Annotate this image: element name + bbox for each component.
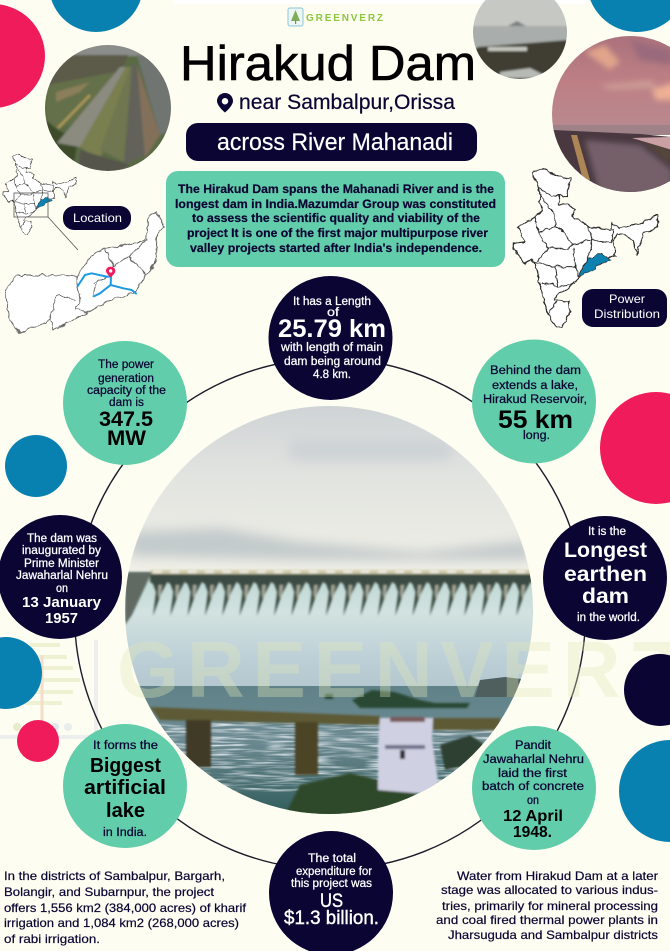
power distribution label: Power — [609, 292, 645, 306]
logo icon — [288, 8, 303, 26]
location label — [63, 206, 131, 230]
fact: inauguration — [0, 515, 122, 639]
text block: industry: stage was allocated to various indus- — [441, 883, 658, 897]
fact: expenditure: $1.3 billion. — [284, 908, 379, 929]
connecting ring — [74, 358, 586, 870]
fact: power capacity: The power — [98, 359, 154, 371]
fact: power capacity: dam is — [109, 397, 144, 409]
text block: irrigation: In the districts of Sambalpur, Bargarh, — [4, 869, 225, 883]
intro panel: The Hirakud Dam spans the Mahanadi River and is the — [178, 182, 494, 196]
map: India locator small — [3, 154, 78, 250]
fact: biggest artificial lake: Biggest — [90, 755, 161, 777]
central photo: Hirakud dam spillway — [120, 400, 540, 820]
fact: expenditure: this project was — [291, 878, 372, 890]
fact: expenditure: The total — [308, 853, 356, 865]
fact: length — [268, 276, 392, 400]
fact: length: of — [327, 307, 340, 319]
fact: concrete: 12 April — [503, 808, 563, 825]
text block: irrigation: Bolangir, and Subarnpur, the project — [4, 885, 215, 899]
logo wordmark: GREENVERZ — [306, 13, 383, 24]
photo: sunset over embankment — [550, 30, 670, 195]
intro panel: valley projects started after India's independence. — [190, 241, 482, 255]
text block: industry: Jharsuguda and Sambalpur districts — [448, 928, 658, 942]
logo — [288, 8, 383, 26]
text block: industry: Water from Hirakud Dam at a later — [457, 869, 658, 883]
location label: Location — [73, 211, 122, 225]
fact: lake: long. — [523, 430, 550, 442]
fact: lake: Hirakud Reservoir, — [483, 394, 587, 406]
fact: longest earthen dam: earthen — [564, 563, 647, 586]
text block: irrigation: of rabi irrigation. — [4, 932, 100, 946]
fact: concrete: Pandit — [515, 740, 552, 752]
text block: irrigation: irrigation and 1,084 km2 (268,000 acres) — [4, 916, 239, 930]
fact: biggest artificial lake: artificial — [84, 777, 166, 799]
fact: lake: 55 km — [498, 406, 573, 434]
fact: power capacity — [63, 341, 187, 465]
text block: industry: and coal fired thermal power plants in — [436, 913, 658, 927]
fact: length: 25.79 km — [278, 315, 386, 343]
fact: longest earthen dam: dam — [582, 585, 629, 608]
text block: irrigation — [4, 869, 247, 946]
fact: biggest artificial lake: lake — [106, 800, 145, 822]
river banner: across River Mahanadi — [217, 129, 453, 156]
fact: inauguration: on — [56, 583, 68, 595]
fact: longest earthen dam: It is the — [588, 526, 626, 538]
fact: inauguration: Jawaharlal Nehru — [16, 570, 108, 582]
fact: concrete: batch of concrete — [482, 781, 584, 793]
fact: power capacity: 347.5 — [99, 408, 153, 431]
fact: concrete: 1948. — [513, 824, 552, 841]
intro panel: to assess the scientific quality and viability of the — [192, 211, 480, 225]
river banner — [186, 123, 477, 161]
intro panel: project It is one of the first major multipurpose river — [187, 226, 488, 240]
river — [77, 273, 137, 297]
fact: expenditure — [269, 831, 393, 951]
fact: inauguration: The dam was — [27, 533, 97, 545]
fact: biggest artificial lake: in India. — [103, 827, 147, 839]
fact: longest earthen dam: Longest — [564, 539, 647, 562]
fact: length: 4.8 km. — [313, 369, 351, 381]
fact: length: It has a Length — [293, 296, 371, 308]
intro panel: longest dam in India.Mazumdar Group was constituted — [175, 197, 496, 211]
fact: biggest artificial lake — [63, 724, 187, 848]
watermark icon — [0, 640, 96, 737]
fact: length: with length of main — [280, 342, 383, 354]
fact: expenditure: US — [320, 891, 343, 912]
watermark wordmark: GREENVERZ — [117, 625, 670, 714]
fact: inauguration: 13 January — [22, 594, 102, 611]
fact: longest earthen dam — [543, 516, 667, 640]
fact: concrete: Jawaharlal Nehru — [483, 754, 584, 766]
decorative circle: navy right — [624, 654, 670, 726]
fact: longest earthen dam: in the world. — [577, 612, 640, 624]
title: Hirakud Dam — [180, 37, 476, 91]
text block: industry — [436, 869, 658, 942]
fact: expenditure: expenditure for — [296, 866, 372, 878]
fact: lake — [472, 340, 596, 464]
fact: power capacity: generation — [98, 373, 154, 385]
text block: industry: tries, primarily for mineral processing — [442, 899, 658, 913]
fact: inauguration: 1957 — [45, 610, 78, 627]
intro panel — [166, 171, 505, 267]
fact: biggest artificial lake: It forms the — [93, 740, 158, 752]
location subtitle: near Sambalpur,Orissa — [239, 91, 455, 114]
fact: length: dam being around — [284, 356, 381, 368]
fact: inauguration: Prime Minister — [24, 558, 99, 570]
map: Orissa districts with river — [5, 212, 165, 333]
power distribution label — [582, 289, 667, 327]
fact: lake: Behind the dam — [490, 365, 581, 377]
text block: irrigation: offers 1,556 km2 (384,000 acres) of kharif — [4, 901, 247, 915]
fact: power capacity: capacity of the — [87, 385, 166, 397]
icon: map pin — [217, 93, 233, 112]
photo: grey lake — [473, 0, 567, 79]
photo: aerial view of dam — [45, 45, 171, 171]
power distribution label: Distribution — [594, 307, 660, 321]
fact: concrete: laid the first — [498, 768, 568, 780]
fact: inauguration: inaugurated by — [22, 545, 101, 557]
fact: concrete: on — [527, 795, 539, 807]
icon: location marker — [106, 267, 115, 277]
map: India with Orissa highlighted — [513, 168, 658, 328]
fact: power capacity: MW — [107, 427, 146, 450]
fact: lake: extends a lake, — [492, 380, 578, 392]
fact: concrete — [472, 726, 596, 850]
